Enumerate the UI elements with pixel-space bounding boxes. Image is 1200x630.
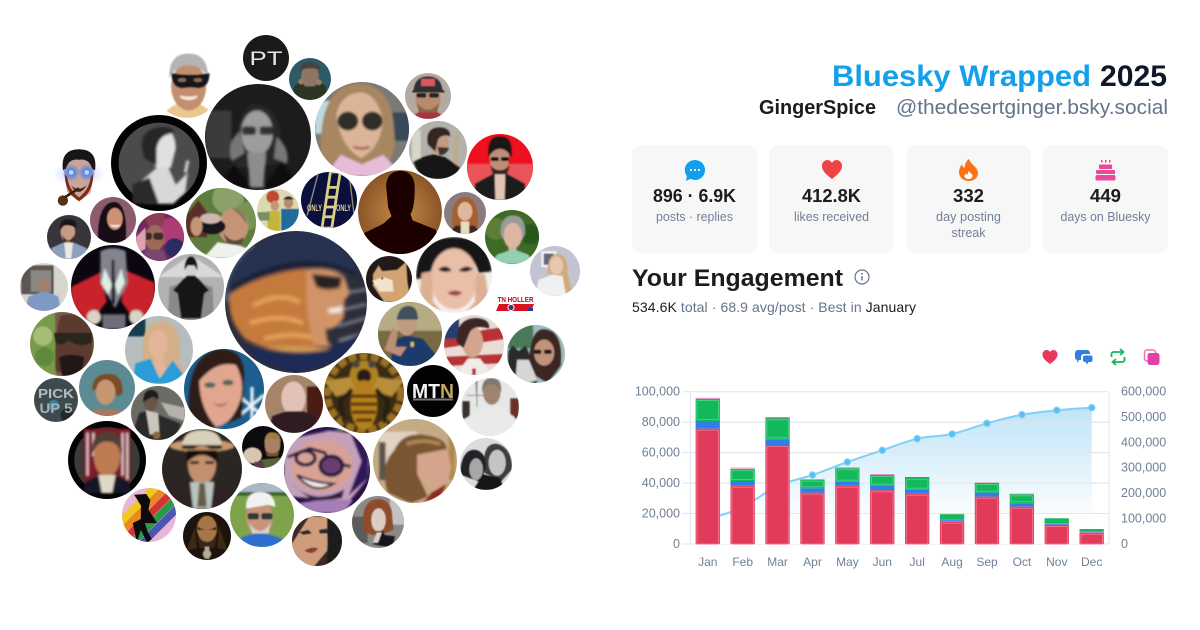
- avatar: young man with flag: [444, 315, 504, 375]
- icon: legend heart: [1042, 350, 1058, 364]
- avatar: TN Holler logo: [496, 295, 534, 311]
- cumulative points: [809, 404, 1095, 478]
- month labels: [698, 555, 1102, 569]
- avatar: man with sunglasses by trees: [30, 312, 94, 376]
- avatar: man drinking: [186, 188, 256, 258]
- right axis labels: 300,000: [1121, 460, 1166, 474]
- avatar: spawn comic: [71, 245, 155, 329]
- avatar: masked man: [166, 52, 210, 118]
- avatar: monochrome woman with glasses: [205, 84, 311, 190]
- stat card: day posting streak: day posting: [936, 209, 1001, 224]
- avatar: man in cap and navy polo: [378, 302, 442, 366]
- stat card: likes received: 412.8K: [802, 186, 861, 206]
- bar: Aug: [940, 514, 964, 544]
- chart legend: [1042, 349, 1160, 365]
- left axis labels: 80,000: [642, 415, 680, 429]
- right axis labels: [1121, 384, 1166, 551]
- left axis labels: 100,000: [635, 384, 680, 398]
- avatar: woman portrait sepia: [292, 516, 342, 566]
- heading: Your Engagement: Your Engagement: [632, 265, 843, 292]
- icon: heart: [822, 160, 842, 179]
- avatar: man in dark coat: [131, 386, 185, 440]
- stat card: day posting streak: streak: [952, 225, 986, 240]
- avatar: bearded long haired man: [183, 512, 231, 560]
- bar: Jan: [696, 398, 720, 544]
- month labels: Oct: [1013, 555, 1032, 569]
- month labels: Dec: [1081, 555, 1102, 569]
- stacked bars: [696, 398, 1104, 544]
- title: Bluesky Wrapped 2025: 2025: [1100, 60, 1167, 93]
- month labels: Feb: [732, 555, 753, 569]
- stat card: day posting streak: [906, 145, 1031, 253]
- month labels: Apr: [803, 555, 822, 569]
- avatar: shiba dog: [366, 256, 412, 302]
- stat card: likes received: likes received: [794, 209, 869, 224]
- right axis labels: 100,000: [1121, 512, 1166, 526]
- avatar: woman with husky: [507, 325, 565, 383]
- avatar: grey haired woman on green: [485, 210, 541, 264]
- avatar: two women monochrome: [460, 438, 512, 490]
- avatar: red haired woman monochrome: [352, 496, 405, 548]
- avatar: woman and snowflake: [184, 349, 264, 429]
- chart: monthly engagement: [635, 384, 1166, 569]
- avatar: smiling man with glasses, purple tone: [284, 427, 370, 513]
- right axis labels: 500,000: [1121, 410, 1166, 424]
- bar: May: [835, 467, 860, 544]
- avatar: main user with navy cap: [225, 231, 367, 373]
- profile name and handle: [759, 97, 1168, 119]
- cumulative line: [708, 408, 1092, 520]
- bar: Sep: [975, 482, 999, 544]
- avatar: man in patterned cap: [405, 73, 451, 119]
- stat card: posts and replies: [632, 145, 757, 253]
- avatar: black ring monochrome portrait: [111, 115, 207, 211]
- icon: chat bubble: [685, 160, 705, 181]
- bar: Oct: [1010, 493, 1034, 544]
- engagement summary: 534.6K total · 68.9 avg/post · Best in January: [632, 299, 916, 315]
- avatar: woman with red hair: [444, 192, 486, 234]
- bar: Jun: [870, 474, 894, 544]
- icon: flame: [959, 159, 978, 181]
- avatar: blonde woman in blue blazer: [125, 316, 193, 384]
- avatar: woman with sunglasses and pink hoodie: [315, 82, 411, 176]
- left axis labels: 60,000: [642, 446, 680, 460]
- avatar: woman with dark hair, smiling: [90, 197, 136, 243]
- left axis labels: [635, 384, 680, 551]
- cumulative area: [708, 408, 1092, 544]
- bar: Dec: [1080, 529, 1104, 544]
- avatar: man with dog photo: [242, 426, 284, 468]
- avatar: PT logo: [243, 35, 289, 81]
- avatar: Pick Up 5 logo: [34, 378, 78, 422]
- right axis labels: 600,000: [1121, 384, 1166, 398]
- icon: birthday cake: [1096, 160, 1116, 180]
- avatar: woman with big sunglasses and curly hair: [136, 209, 185, 261]
- avatar: cartoon man with glowing eyes: [52, 149, 106, 206]
- avatar: woman with curly hair laughing: [373, 419, 457, 503]
- icon: info: [855, 270, 869, 284]
- bar: Nov: [1045, 518, 1069, 544]
- avatar: woman with hands on head: [416, 237, 492, 313]
- avatar: bee illustration: [324, 353, 404, 433]
- avatar: MTN logo: MT: [412, 381, 440, 403]
- avatar: man in suit: [47, 215, 91, 259]
- profile name and handle: GingerSpice: [759, 97, 876, 119]
- month labels: Aug: [941, 555, 963, 569]
- avatar: older man in blue shirt: [20, 263, 68, 311]
- avatar: rainbow stripes and dancer silhouette: [111, 483, 181, 553]
- avatar: road marked only: ONLY: [336, 203, 351, 213]
- avatar: group of people in costume: [257, 189, 299, 231]
- month labels: Jan: [698, 555, 717, 569]
- right axis labels: 0: [1121, 537, 1128, 551]
- icon: legend quotes: [1144, 350, 1160, 365]
- stat card: day posting streak: 332: [953, 186, 984, 206]
- right axis labels: 200,000: [1121, 486, 1166, 500]
- title: Bluesky Wrapped 2025: Bluesky Wrapped: [832, 60, 1091, 93]
- avatar: gothic woman on throne: [158, 254, 224, 320]
- stat card: days on Bluesky: [1043, 145, 1168, 253]
- avatar: man with hand on face: [289, 58, 331, 100]
- left axis labels: 40,000: [642, 476, 680, 490]
- icon: legend replies: [1075, 350, 1092, 364]
- month labels: Nov: [1046, 555, 1067, 569]
- avatar: bearded man in profile with black tee: [409, 121, 467, 179]
- avatar: Pick Up 5 logo: UP 5: [40, 400, 73, 416]
- right axis labels: 400,000: [1121, 436, 1166, 450]
- avatar: young man in white hat and suit: [162, 429, 242, 509]
- bar: Feb: [730, 467, 755, 544]
- avatar: man in white cap on golf course: [230, 483, 294, 547]
- stat card: days on Bluesky: 449: [1090, 186, 1121, 206]
- month labels: Jun: [873, 555, 892, 569]
- avatar: man in black ring with red backdrop: [68, 421, 146, 499]
- month labels: Jul: [910, 555, 925, 569]
- avatar: man in white shirt: [461, 378, 519, 436]
- stat card: days on Bluesky: days on Bluesky: [1060, 209, 1151, 224]
- month labels: Sep: [976, 555, 998, 569]
- avatar: MTN logo: N: [440, 381, 454, 403]
- icon: legend reposts: [1112, 349, 1124, 365]
- avatar: Pick Up 5 logo: PICK: [38, 386, 75, 401]
- avatar: silhouette: [358, 170, 442, 254]
- avatar: road marked only: ONLY: [307, 203, 322, 213]
- profile name and handle: @thedesertginger.bsky.social: [896, 97, 1168, 119]
- stat card: posts and replies: posts · replies: [656, 209, 733, 224]
- left axis labels: 20,000: [642, 506, 680, 520]
- avatar: PT logo: PT: [250, 49, 283, 70]
- avatar: blond man on teal: [79, 360, 135, 416]
- bar: Jul: [905, 477, 929, 544]
- avatar: road marked only: [301, 172, 357, 228]
- bar: Mar: [765, 417, 790, 544]
- bar: Apr: [800, 479, 825, 544]
- avatar collage: [20, 35, 580, 566]
- avatar: sunglasses man on red stripes: [467, 134, 533, 200]
- avatar: bald smiling man: [265, 375, 324, 433]
- stat card: posts and replies: 896 · 6.9K: [653, 186, 736, 206]
- stat card: likes received: [769, 145, 894, 253]
- avatar: blonde woman in white: [530, 246, 580, 296]
- avatar: TN Holler logo: TN HOLLER: [498, 295, 534, 304]
- month labels: May: [836, 555, 859, 569]
- month labels: Mar: [767, 555, 788, 569]
- avatar: MTN logo: [407, 365, 459, 417]
- left axis labels: 0: [673, 537, 680, 551]
